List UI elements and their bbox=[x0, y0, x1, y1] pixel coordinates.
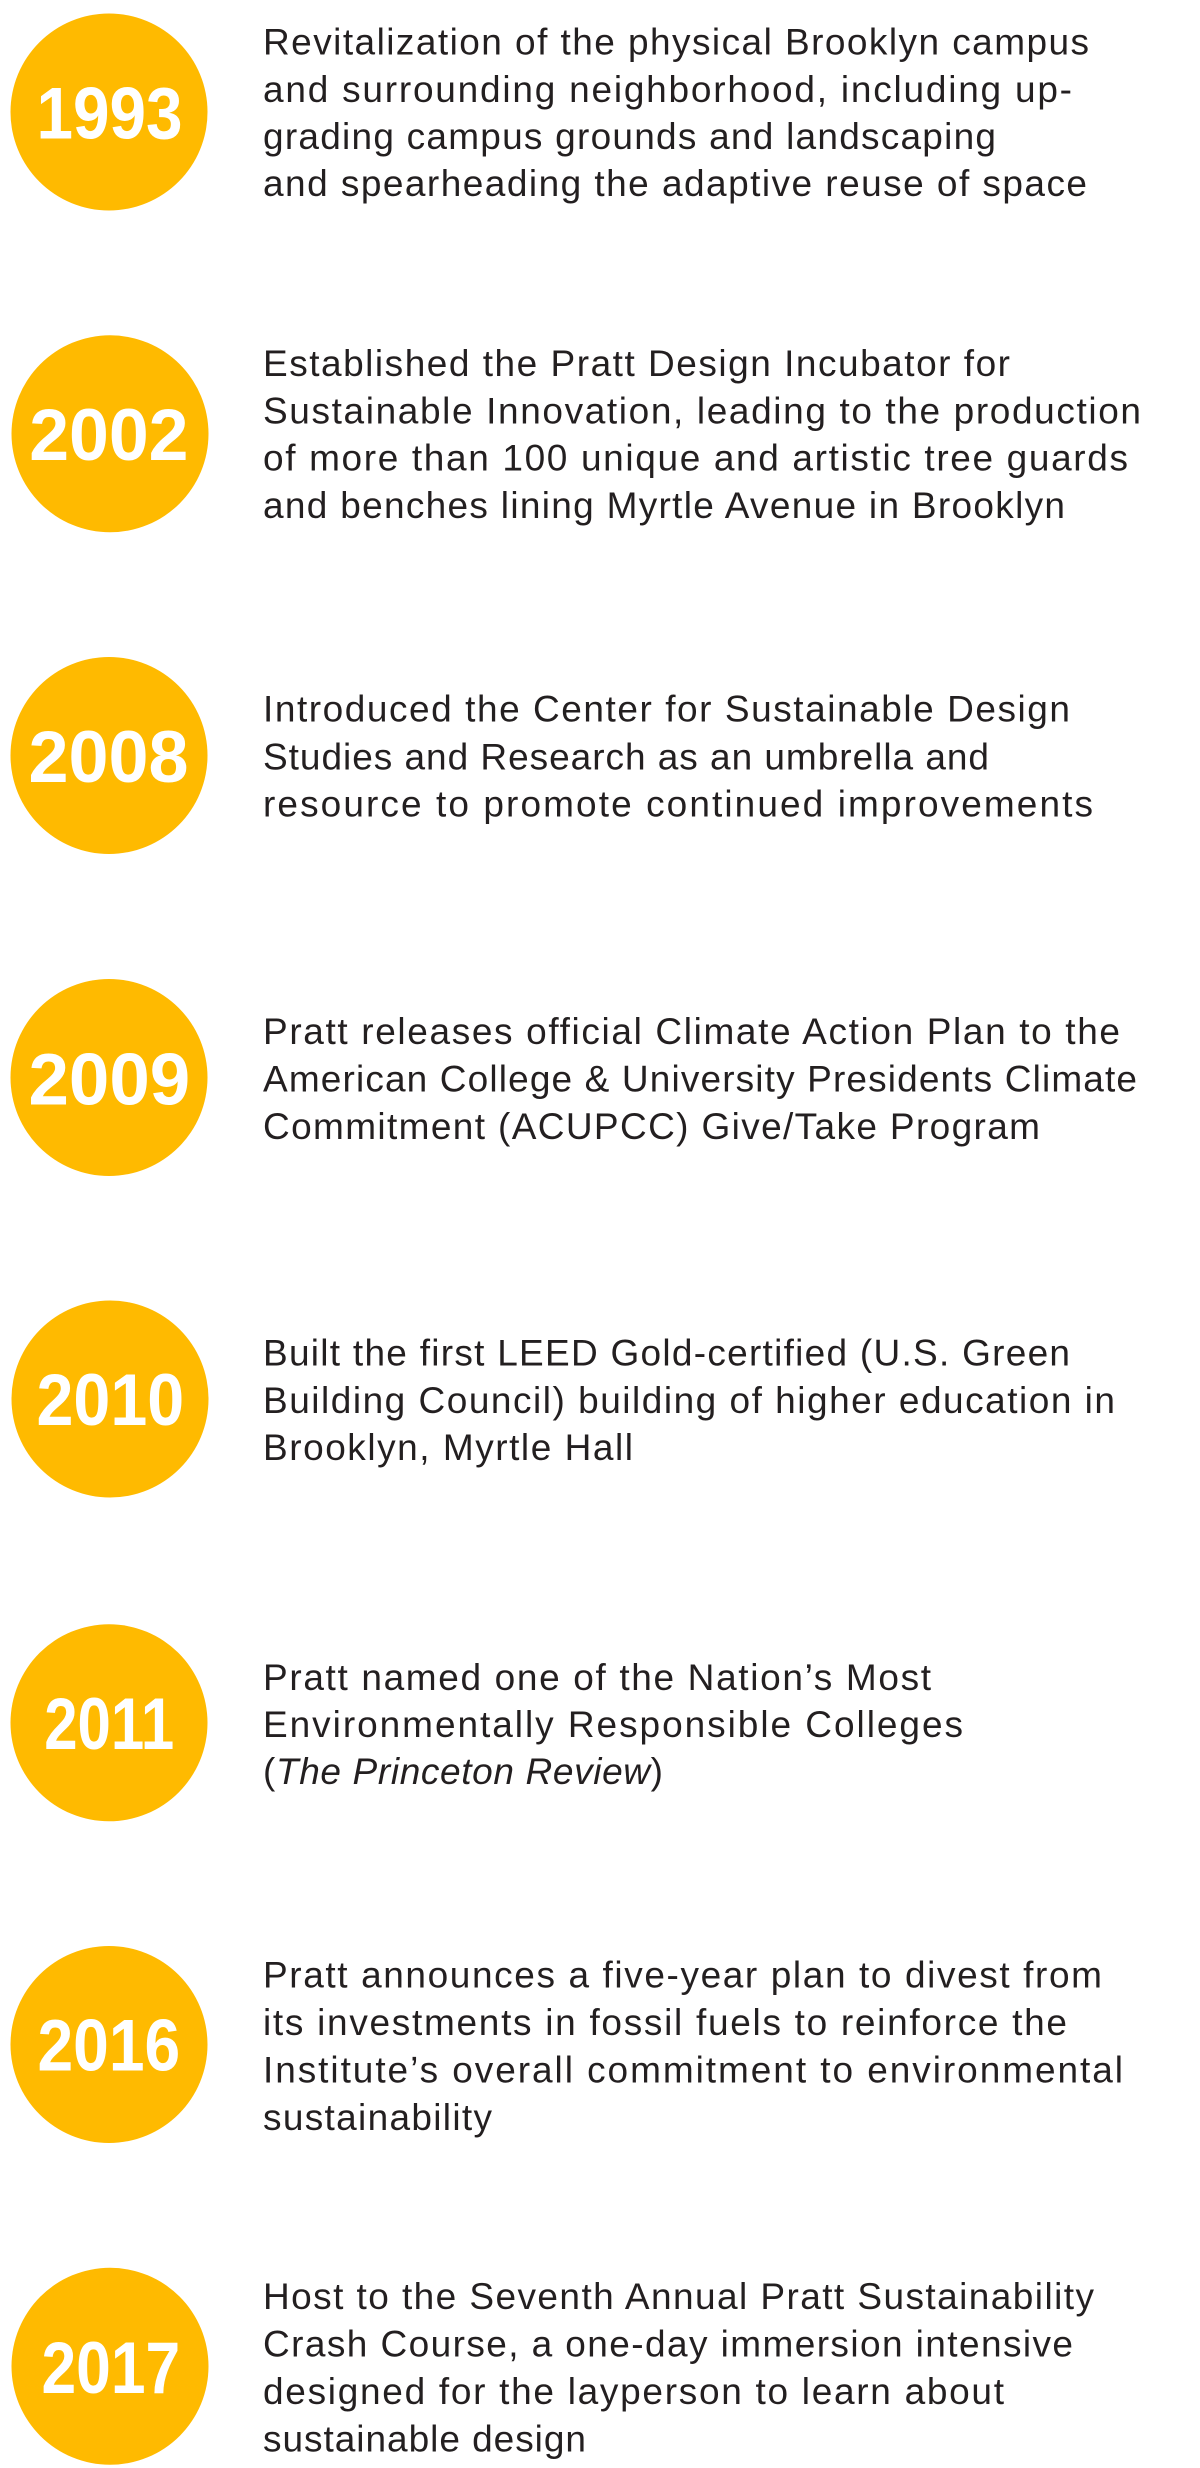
year badge: 2011 bbox=[10, 1624, 208, 1821]
text: 2011 milestone: Environmentally Responsible Colleges bbox=[263, 1704, 963, 1745]
year badge: 2010: 2010 bbox=[36, 1360, 184, 1441]
year badge: 2009: 2009 bbox=[28, 1039, 190, 1120]
entry: 2017 bbox=[12, 2268, 1094, 2465]
text: 2011 milestone: (The Princeton Review) bbox=[263, 1751, 663, 1792]
entry: 2010 bbox=[12, 1300, 1115, 1498]
text: 2016 milestone: Institute’s overall commitment to environmental bbox=[263, 2050, 1123, 2091]
year badge: 2002: 2002 bbox=[29, 395, 189, 476]
text: 2008 milestone bbox=[263, 689, 1093, 825]
year badge: 2008: 2008 bbox=[28, 717, 188, 798]
text: 2017 milestone: Host to the Seventh Annual Pratt Sustainability bbox=[263, 2276, 1094, 2317]
year badge: 2002 bbox=[12, 335, 208, 532]
text: 2017 milestone: sustainable design bbox=[263, 2418, 586, 2459]
text: 2009 milestone: American College & University Presidents Climate bbox=[263, 1058, 1137, 1100]
text: 1993 milestone: and spearheading the adaptive reuse of space bbox=[263, 163, 1087, 204]
text: 2002 milestone: Established the Pratt Design Incubator for bbox=[263, 343, 1010, 384]
text: 2009 milestone: Pratt releases official Climate Action Plan to the bbox=[263, 1011, 1120, 1052]
entry: 2002 bbox=[12, 335, 1141, 532]
text: 2011 milestone bbox=[263, 1657, 963, 1792]
text: 2017 milestone: Crash Course, a one-day immersion intensive bbox=[263, 2323, 1073, 2364]
year badge: 2008 bbox=[10, 657, 208, 854]
entry: 1993 bbox=[10, 14, 1089, 210]
text: 2002 milestone: and benches lining Myrtle Avenue in Brooklyn bbox=[263, 485, 1065, 526]
text: 2016 milestone: sustainability bbox=[263, 2097, 492, 2138]
entry: 2008 bbox=[10, 657, 1093, 854]
text: 2002 milestone: of more than 100 unique and artistic tree guards bbox=[263, 438, 1128, 479]
entry: 2009 bbox=[10, 979, 1137, 1176]
text: 2016 milestone: its investments in fossil fuels to reinforce the bbox=[263, 2002, 1067, 2043]
year badge: 2017: 2017 bbox=[42, 2328, 180, 2409]
year badge: 2016 bbox=[10, 1946, 208, 2143]
text: 2008 milestone: Introduced the Center for Sustainable Design bbox=[263, 689, 1070, 730]
text: 2002 milestone: Sustainable Innovation, leading to the production bbox=[263, 390, 1141, 431]
year badge: 2011: 2011 bbox=[44, 1684, 174, 1765]
year badge: 2010 bbox=[12, 1300, 208, 1498]
year badge: 1993 bbox=[10, 14, 208, 210]
text: 2010 milestone: Brooklyn, Myrtle Hall bbox=[263, 1427, 633, 1468]
entry: 2011 bbox=[10, 1624, 963, 1821]
text: 2008 milestone: Studies and Research as an umbrella and bbox=[263, 736, 989, 777]
text: 1993 milestone: and surrounding neighborhood, including up- bbox=[263, 69, 1072, 110]
text: 1993 milestone: grading campus grounds and landscaping bbox=[263, 116, 996, 157]
text: 2016 milestone: Pratt announces a five-year plan to divest from bbox=[263, 1955, 1102, 1996]
text: 2008 milestone: resource to promote continued improvements bbox=[263, 784, 1093, 825]
year badge: 2009 bbox=[10, 979, 208, 1176]
year badge: 2016: 2016 bbox=[38, 2006, 180, 2087]
text: 2009 milestone: Commitment (ACUPCC) Give/Take Program bbox=[263, 1106, 1040, 1147]
text: 1993 milestone: Revitalization of the physical Brooklyn campus bbox=[263, 21, 1089, 62]
text: 2017 milestone: designed for the layperson to learn about bbox=[263, 2371, 1005, 2412]
text: 2009 milestone bbox=[263, 1011, 1137, 1147]
text: 2017 milestone bbox=[263, 2276, 1094, 2459]
text: 2010 milestone bbox=[263, 1332, 1115, 1468]
text: 2010 milestone: Built the first LEED Gold-certified (U.S. Green bbox=[263, 1332, 1070, 1374]
year badge: 2017 bbox=[12, 2268, 208, 2465]
text: 1993 milestone bbox=[263, 21, 1089, 204]
text: 2016 milestone bbox=[263, 1955, 1123, 2138]
text: 2010 milestone: Building Council) building of higher education in bbox=[263, 1380, 1115, 1421]
year badge: 1993: 1993 bbox=[36, 73, 182, 154]
entry: 2016 bbox=[10, 1946, 1123, 2143]
text: 2002 milestone bbox=[263, 343, 1141, 526]
text: 2011 milestone: Pratt named one of the Nation’s Most bbox=[263, 1657, 932, 1698]
